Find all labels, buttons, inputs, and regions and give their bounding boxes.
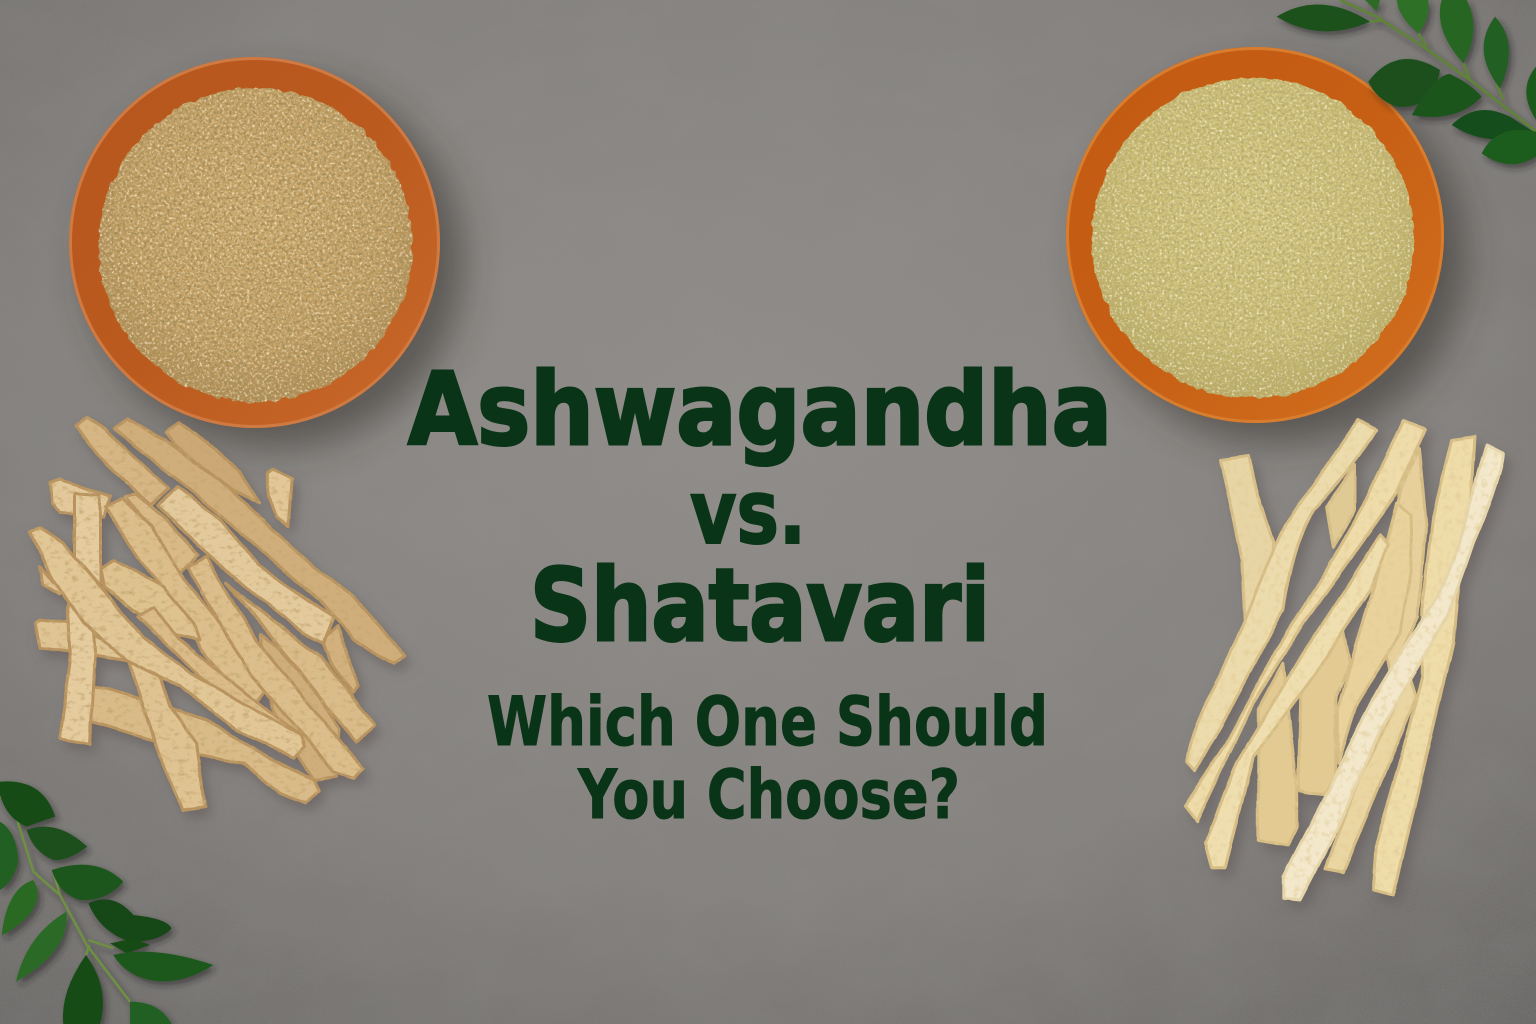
icon: ashwagandha powder bowl <box>69 57 463 448</box>
icon: ashwagandha roots pile <box>31 417 406 810</box>
icon: shatavari roots pile <box>1185 420 1503 900</box>
icon: leaf sprig top right <box>1277 0 1536 164</box>
icon: leaf sprig bottom left <box>0 781 213 1024</box>
title: Ashwagandha: Ashwagandha <box>408 351 1112 468</box>
subtitle: You Choose?: You Choose? <box>577 756 960 835</box>
subtitle: Which One Should: Which One Should <box>487 683 1048 762</box>
title: Shatavari: Shatavari <box>530 547 990 664</box>
icon: shatavari powder bowl <box>1066 47 1466 444</box>
title: vs.: vs. <box>690 461 806 564</box>
